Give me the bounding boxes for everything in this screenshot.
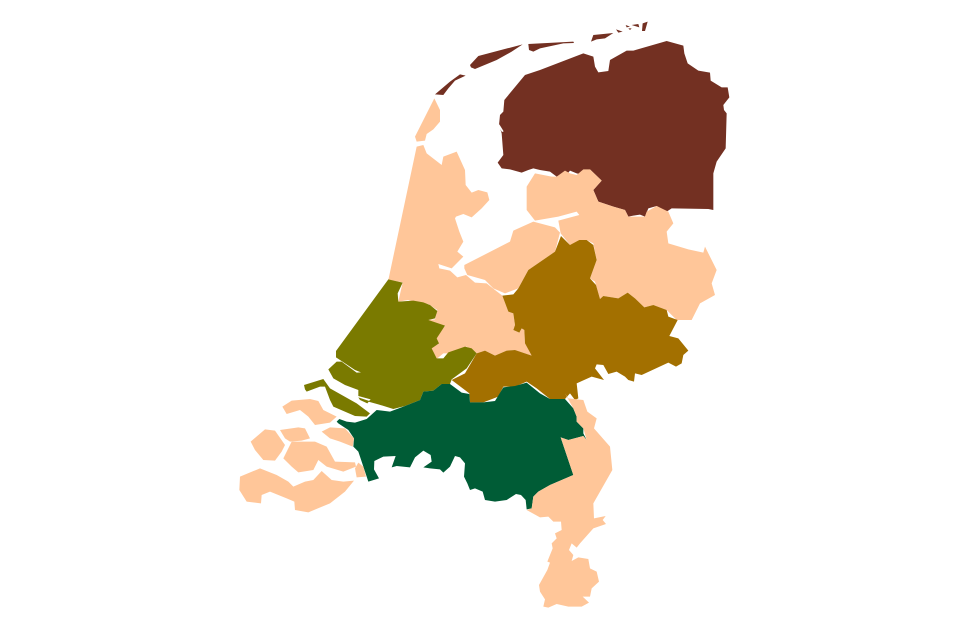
- region: Gelderland (ochre): [452, 236, 688, 402]
- region: Noord-Holland, Utrecht, Flevoland, Overijssel (peach): [388, 145, 717, 358]
- region: Zuid-Holland (olive): [304, 279, 477, 417]
- region: north (brown): [435, 22, 729, 217]
- region: Noord-Brabant (green): [337, 383, 587, 509]
- region: Texel island (peach): [415, 98, 440, 142]
- region: Zeeland (peach): [239, 399, 366, 512]
- region: Limburg (peach): [527, 393, 612, 608]
